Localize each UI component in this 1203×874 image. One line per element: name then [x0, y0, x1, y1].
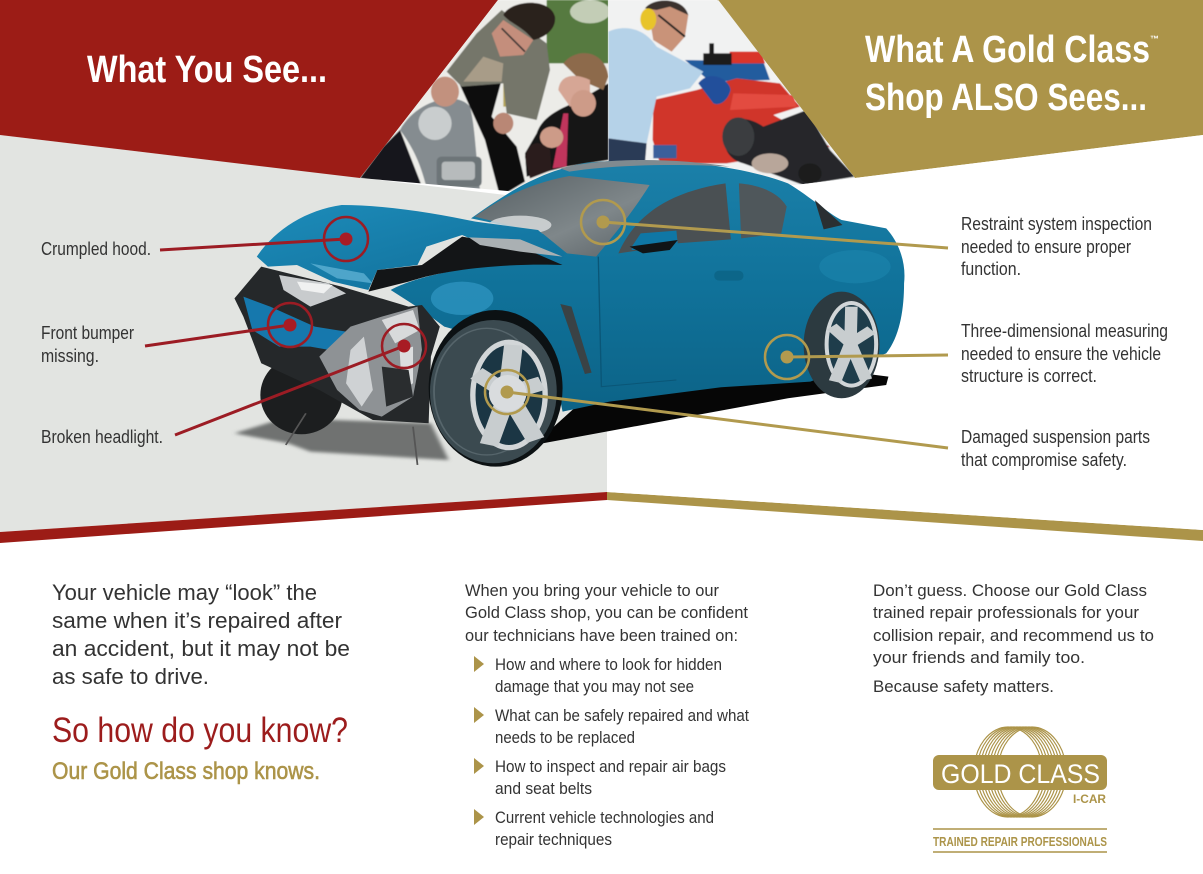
answer subheading: Our Gold Class shop knows. — [52, 758, 320, 785]
photo: technician measuring an engine — [608, 0, 855, 186]
text block: intro statement — [52, 580, 350, 689]
text block: call to action: trained repair professionals for your — [873, 604, 1140, 622]
rear quarter window — [815, 200, 842, 229]
callout: damaged suspension parts — [485, 370, 1150, 470]
callout: three-dimensional measuring: structure is correct. — [961, 366, 1097, 386]
door seam and handle — [598, 257, 743, 387]
side vent — [560, 304, 592, 374]
callout: front bumper missing — [41, 303, 312, 366]
callout: damaged suspension parts: that compromise safety. — [961, 450, 1127, 470]
gray roof trim — [560, 160, 730, 172]
text block: training intro: Gold Class shop, you can be confident — [465, 604, 748, 622]
bullet list: training topics: and seat belts — [495, 779, 592, 798]
text block: training intro: our technicians have been trained on: — [465, 627, 738, 645]
callout: broken headlight — [41, 324, 426, 447]
bullet list: training topics: How and where to look for hidden — [495, 655, 722, 674]
hood highlight — [310, 263, 373, 283]
fender highlight — [431, 282, 493, 315]
front wheel — [430, 320, 557, 463]
text block: call to action: collision repair, and recommend us to — [873, 627, 1154, 645]
text block: call to action: Because safety matters. — [873, 678, 1054, 696]
front side window — [618, 183, 731, 253]
callout: three-dimensional measuring: needed to ensure the vehicle — [961, 344, 1161, 364]
bullet list: training topics: How to inspect and repair air bags — [495, 757, 726, 776]
callout: crumpled hood — [41, 217, 368, 261]
shadow under car — [234, 367, 888, 460]
car body — [391, 161, 904, 412]
text block: call to action: your friends and family too. — [873, 649, 1085, 667]
heading: what a gold class shop also sees: ™ — [1150, 34, 1159, 44]
logo: Gold Class I-CAR — [933, 727, 1107, 852]
red header banner — [0, 0, 498, 178]
logo: Gold Class I-CAR: GOLD CLASS — [941, 759, 1100, 789]
bullet list: training topics: needs to be replaced — [495, 728, 635, 747]
gold band under white panel — [607, 492, 1203, 541]
car illustration — [234, 160, 904, 467]
wreckage front end — [234, 267, 440, 465]
logo: Gold Class I-CAR: TRAINED REPAIR PROFESSIONALS — [933, 834, 1107, 849]
text block: training intro — [465, 582, 748, 645]
callout: crumpled hood: Crumpled hood. — [41, 239, 151, 259]
callout: damaged suspension parts: Damaged suspension parts — [961, 427, 1150, 447]
text block: training intro: When you bring your vehicle to our — [465, 582, 720, 600]
text block: intro statement: same when it’s repaired after — [52, 608, 342, 633]
bullet list: training topics: What can be safely repaired and what — [495, 706, 749, 725]
callout: front bumper missing: Front bumper — [41, 323, 134, 343]
crumple highlight — [469, 237, 563, 257]
callout: front bumper missing: missing. — [41, 346, 99, 366]
front wheel arch — [429, 310, 563, 467]
heading: what a gold class shop also sees: Shop ALSO Sees... — [865, 77, 1147, 119]
callout: three-dimensional measuring: Three-dimensional measuring — [961, 321, 1168, 341]
callout: restraint system inspection: function. — [961, 259, 1021, 279]
rear wheel — [804, 292, 880, 398]
panel: grey what-you-see background — [0, 135, 607, 532]
callout: restraint system inspection: Restraint system inspection — [961, 214, 1152, 234]
bullet list: training topics: Current vehicle technologies and — [495, 808, 714, 827]
heading: what a gold class shop also sees — [865, 29, 1159, 119]
text block: call to action — [873, 582, 1154, 696]
text block: call to action: Don’t guess. Choose our Gold Class — [873, 582, 1147, 600]
callout: three-dimensional measuring — [765, 321, 1168, 386]
quarter panel highlight — [819, 250, 891, 283]
callout: broken headlight: Broken headlight. — [41, 427, 163, 447]
rear side window — [739, 183, 787, 238]
bullet list: training topics — [474, 655, 749, 849]
white panel under gold banner — [607, 135, 1203, 530]
callout: restraint system inspection: needed to ensure proper — [961, 237, 1131, 257]
photo: man and woman inspecting damaged car — [360, 0, 610, 200]
text block: intro statement: Your vehicle may “look” the — [52, 580, 317, 605]
callout: restraint system inspection — [581, 200, 1152, 279]
text block: intro statement: as safe to drive. — [52, 664, 209, 689]
bullet list: training topics: repair techniques — [495, 830, 612, 849]
far front tyre — [260, 356, 342, 434]
windshield — [475, 176, 650, 257]
windshield reflection — [489, 216, 551, 234]
heading: what you see: What You See... — [87, 49, 327, 91]
hood crumple gap — [368, 237, 563, 292]
text block: intro statement: an accident, but it may not be — [52, 636, 350, 661]
red band under grey panel — [0, 492, 607, 543]
logo: Gold Class I-CAR: I-CAR — [1073, 792, 1106, 806]
bullet list: training topics: damage that you may not see — [495, 677, 694, 696]
gold header banner — [717, 0, 1203, 178]
side mirror — [630, 231, 678, 253]
crumpled hood — [257, 205, 565, 290]
heading: what a gold class shop also sees: What A Gold Class — [865, 29, 1150, 71]
question heading: So how do you know? — [52, 711, 348, 750]
